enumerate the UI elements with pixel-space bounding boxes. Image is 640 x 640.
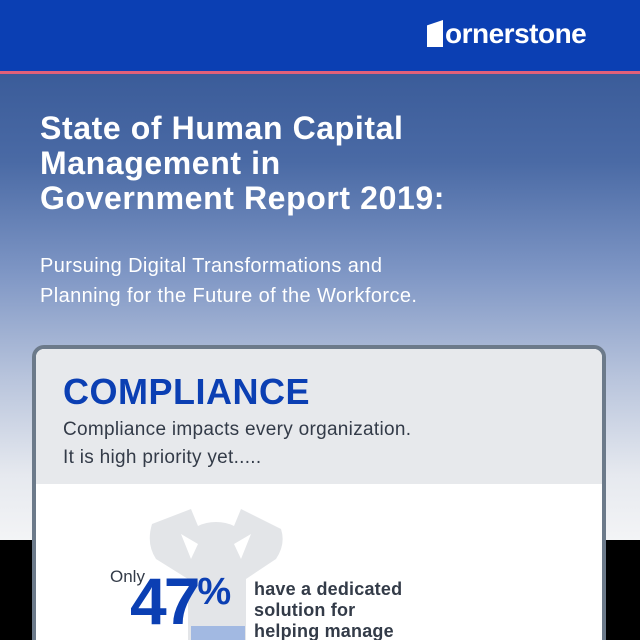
title: Management in	[40, 145, 281, 181]
header bar	[0, 0, 640, 71]
stat: 47%	[110, 564, 402, 640]
title: State of Human Capital	[40, 110, 403, 146]
subtitle: Planning for the Future of the Workforce.	[40, 285, 417, 307]
panel: compliance	[32, 345, 606, 640]
subtitle	[40, 255, 417, 307]
intro text: It is high priority yet.....	[63, 447, 261, 468]
intro text	[63, 419, 411, 468]
title: Government Report 2019:	[40, 180, 445, 216]
icon: person silhouette	[150, 509, 282, 640]
stat: 47%: solution for	[254, 600, 355, 620]
stat: 47%: 47%	[130, 564, 231, 638]
stat: 47%: have a dedicated	[254, 579, 402, 599]
intro text: Compliance impacts every organization.	[63, 419, 411, 440]
logo: ornerstone	[445, 18, 586, 49]
heading: COMPLIANCE	[63, 371, 310, 412]
stat: 47%: Only	[110, 567, 145, 586]
title	[40, 110, 445, 216]
subtitle: Pursuing Digital Transformations and	[40, 255, 382, 277]
